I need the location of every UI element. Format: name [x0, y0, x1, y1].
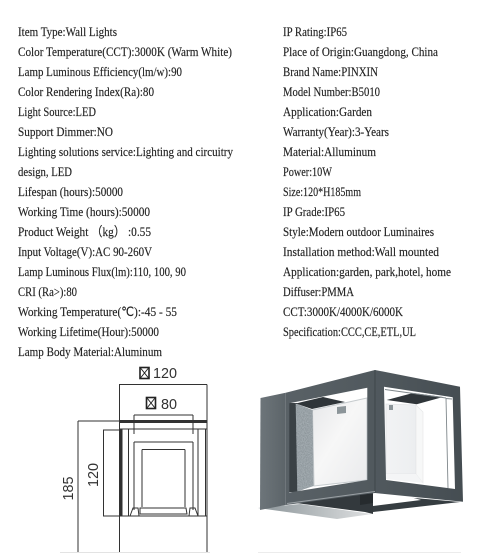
textured grey side wall: [296, 404, 314, 492]
label: width 120: 120: [153, 365, 177, 382]
label: inner width 80: 80: [161, 396, 177, 413]
text block: left specification list: Lighting solutions service:Lighting and circuitry: [18, 144, 233, 159]
text block: left specification list: Light Source:LED: [18, 104, 96, 119]
text block: right specification list: Diffuser:PMMA: [283, 284, 354, 299]
left glass pane: [312, 398, 367, 486]
glass diffuser and interior: [289, 393, 443, 492]
text block: right specification list: Model Number:B5010: [283, 84, 380, 99]
product photo: wall light: [258, 370, 463, 519]
text block: right specification list: IP Grade:IP65: [283, 204, 345, 219]
icon: 80 square dimension symbol: [146, 398, 156, 408]
text block: right specification list: Specification:CCC,CE,ETL,UL: [283, 324, 416, 339]
mounting back plate: [260, 393, 286, 510]
text block: right specification list: Warranty(Year):3-Years: [283, 124, 389, 139]
shadow under lamp: [258, 504, 372, 519]
label: overall height 185: 185: [60, 476, 77, 500]
text block: left specification list: design, LED: [18, 164, 72, 179]
text block: left specification list: Color Rendering Index(Ra):80: [18, 84, 154, 99]
right glass pane: [386, 404, 416, 474]
label: body height 120: 120: [85, 463, 102, 487]
text block: left specification list: Lamp Luminous Flux(lm):110, 100, 90: [18, 264, 186, 279]
dark interior strip: [289, 403, 298, 492]
right glass side strip: [416, 405, 423, 483]
text block: left specification list: CRI (Ra>):80: [18, 284, 77, 299]
text block: left specification list: Input Voltage(V):AC 90-260V: [18, 244, 153, 259]
faint cut-off text at bottom edge: [60, 552, 210, 553]
text block: left specification list: Item Type:Wall Lights: [18, 24, 117, 39]
text block: left specification list: Working Lifetime(Hour):50000: [18, 324, 159, 339]
wall shadow left of back plate: [257, 402, 259, 510]
front cube frame: [286, 370, 463, 505]
technical dimension drawing: [60, 365, 207, 553]
text block: right specification list: CCT:3000K/4000K/6000K: [283, 304, 404, 319]
text block: left specification list: Working Time (hours):50000: [18, 204, 150, 219]
inner frame edge highlight: [385, 390, 452, 488]
icon: 120 square dimension symbol: [140, 368, 149, 378]
text block: right specification list: [283, 24, 451, 339]
text block: right specification list: Size:120*H185mm: [283, 184, 361, 199]
text block: left specification list: Color Temperature(CCT):3000K (Warm White): [18, 44, 232, 59]
dark top plate left: [296, 397, 345, 409]
center post edge: [374, 370, 376, 493]
text block: left specification list: Lamp Body Material:Aluminum: [18, 344, 162, 359]
text block: left specification list: Lifespan (hours):50000: [18, 184, 123, 199]
text block: right specification list: Material:Alluminum: [283, 144, 376, 159]
faint cut-off text at bottom right: [258, 552, 461, 553]
clip details: [337, 405, 393, 414]
text block: left specification list: [18, 24, 233, 359]
text block: right specification list: Application:Garden: [283, 104, 372, 119]
text block: right specification list: IP Rating:IP65: [283, 24, 347, 39]
text block: left specification list: Working Temperature(℃):-45 - 55: [18, 304, 177, 319]
dark top plate right: [387, 393, 443, 404]
text block: right specification list: Application:garden, park,hotel, home: [283, 264, 451, 279]
text block: right specification list: Place of Origin:Guangdong, China: [283, 44, 438, 59]
drawing: lamp front elevation outline: [78, 384, 207, 553]
text block: right specification list: Brand Name:PINXIN: [283, 64, 379, 79]
lower rear frame bars: [296, 493, 460, 514]
lower bar bevel: [287, 492, 375, 504]
text block: right specification list: Installation method:Wall mounted: [283, 244, 439, 259]
text block: left specification list: Product Weight （kg） :0.55: [18, 224, 151, 239]
text block: left specification list: Lamp Luminous Efficiency(lm/w):90: [18, 64, 182, 79]
text block: left specification list: Support Dimmer:NO: [18, 124, 113, 139]
text block: right specification list: Power:10W: [283, 164, 333, 179]
right glass lower edge: [386, 474, 423, 483]
text block: right specification list: Style:Modern outdoor Luminaires: [283, 224, 434, 239]
